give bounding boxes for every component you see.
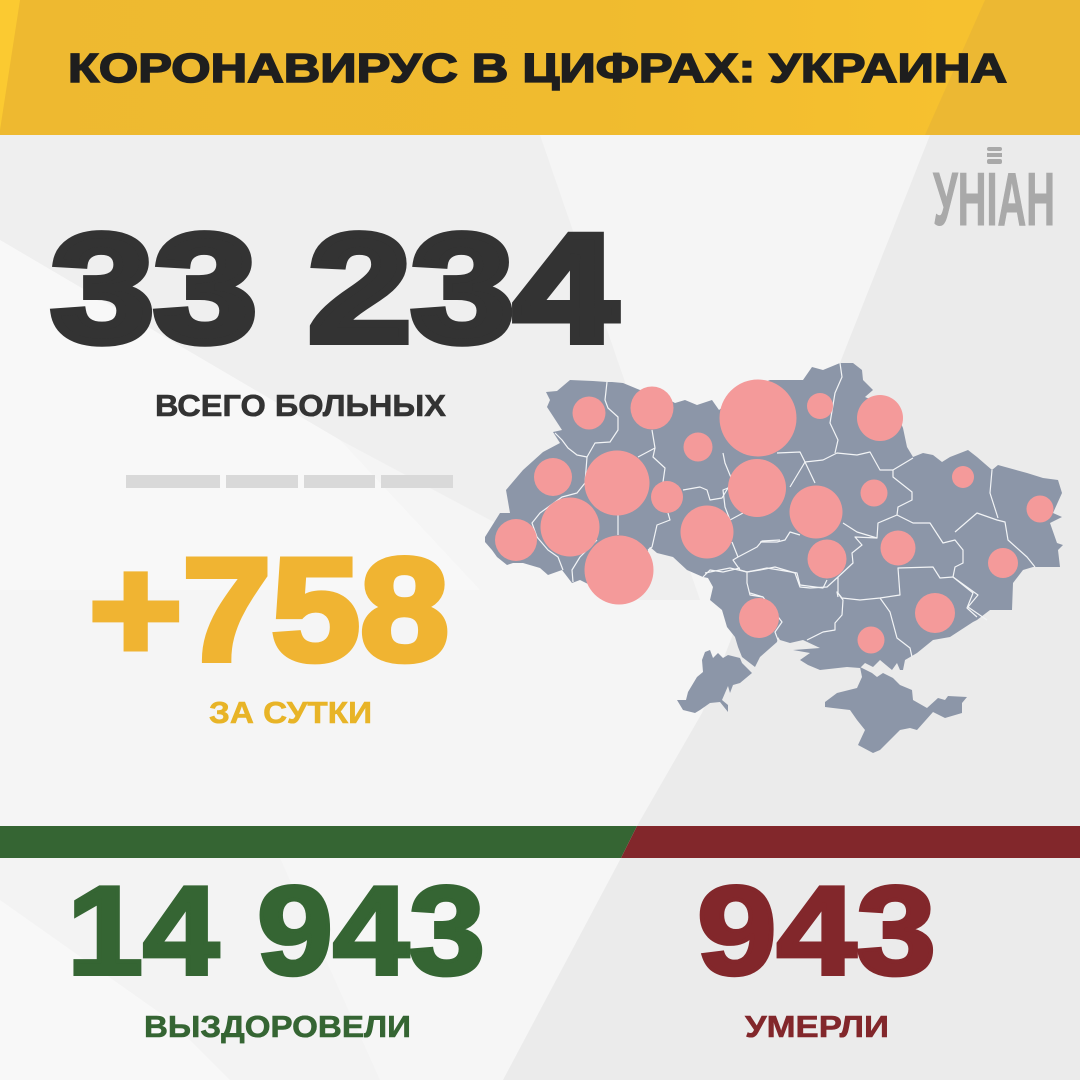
deaths label: УМЕРЛИ [745, 1009, 889, 1044]
Budjak outline [677, 650, 752, 713]
deaths number: 943 [697, 860, 936, 1001]
mainland outline [485, 363, 1063, 670]
recovered number: 14 943 [67, 860, 485, 1001]
total cases label: ВСЕГО БОЛЬНЫХ [155, 388, 446, 423]
case circles [495, 380, 1054, 654]
map of Ukraine [485, 363, 1063, 753]
title: КОРОНАВИРУС В ЦИФРАХ: УКРАИНА [68, 45, 1007, 91]
region borders [532, 363, 1035, 657]
Crimea outline [825, 667, 967, 753]
band: deaths [621, 826, 1080, 858]
daily increase label: ЗА СУТКИ [209, 695, 372, 730]
total cases number: 33 234 [51, 203, 617, 374]
band: recovered [0, 826, 637, 858]
recovered label: ВЫЗДОРОВЕЛИ [144, 1009, 411, 1044]
header banner [0, 0, 1080, 135]
daily increase number: +758 [89, 528, 449, 691]
divider bars [126, 475, 453, 488]
